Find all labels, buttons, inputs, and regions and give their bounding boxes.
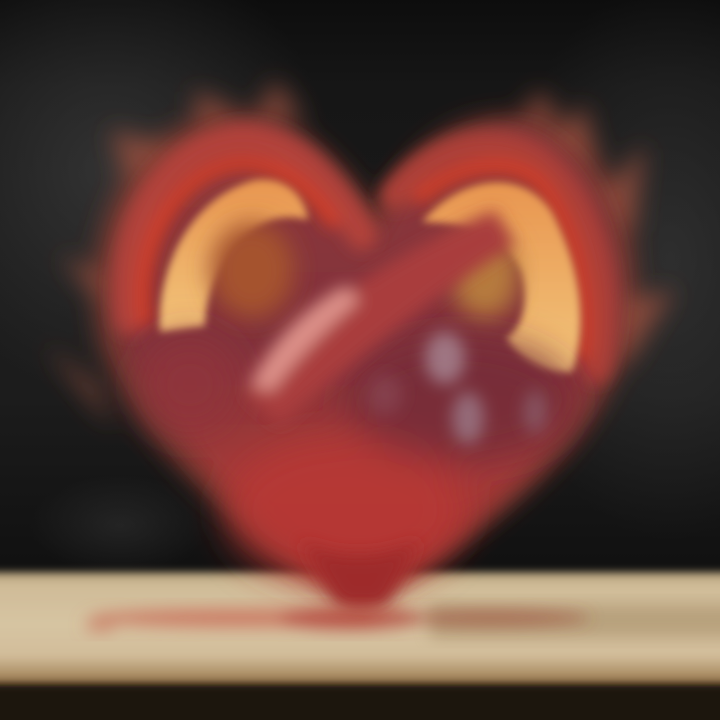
heart: right yellow inner arch (422, 182, 581, 372)
heart: left inner cavity (210, 222, 294, 318)
heart: fuzzy outer halo with spikes (45, 80, 675, 610)
spill: red smear on table (84, 606, 590, 633)
heart: left yellow inner arch (160, 179, 308, 332)
heart: central vessel (245, 210, 515, 425)
heart: right inner cavity (451, 231, 519, 319)
heart: main body (120, 129, 616, 605)
table: wooden surface (0, 572, 720, 720)
heart: pale highlights (367, 332, 547, 444)
heart: left red arch (127, 140, 362, 320)
heart: lower chamber shading (140, 335, 575, 585)
heart: base tapering to table (300, 540, 420, 605)
heart: right red arch (395, 147, 602, 368)
